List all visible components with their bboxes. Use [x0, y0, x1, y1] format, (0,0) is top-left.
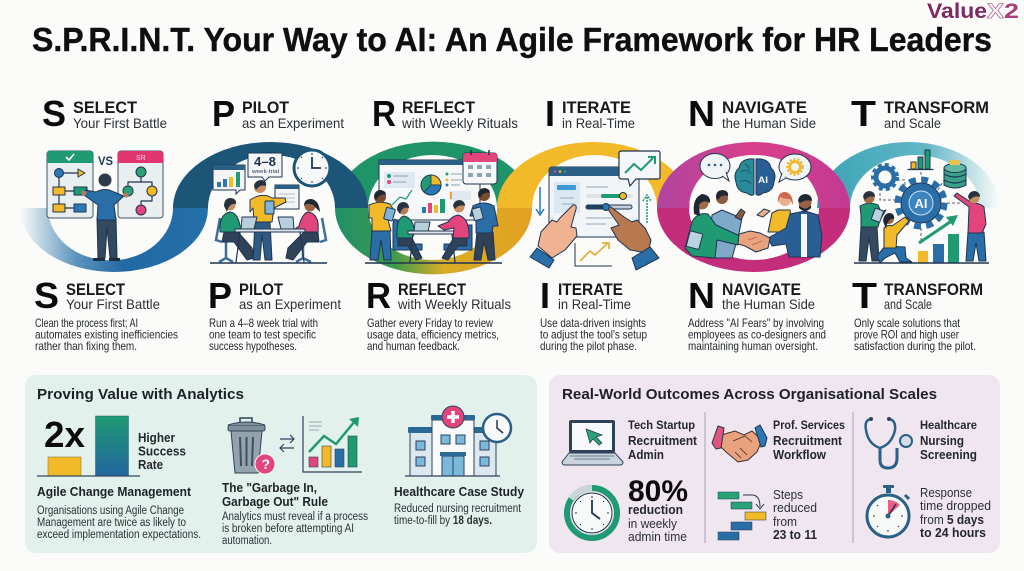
- text: Garbage In, Garbage Out: Analytics must reveal if a process: [222, 511, 368, 523]
- icon: stopwatch: [867, 485, 909, 537]
- label: Tech Startup: [628, 418, 698, 462]
- heading: Select: [42, 93, 167, 134]
- text: Agile Change Management: Organisations using Agile Change: [37, 505, 184, 517]
- step: Pilot: as an Experiment: [239, 296, 341, 312]
- step: Navigate: the Human Side: [722, 296, 815, 312]
- hand: left: [530, 205, 577, 268]
- process card: messy: SR: [136, 155, 146, 162]
- panel heading: Real-World Outcomes Across Organisational Scales: [562, 386, 937, 403]
- dividers: [705, 412, 853, 543]
- text: Healthcare Case Study: Healthcare Case Study: [394, 484, 525, 499]
- label: higher success rate: Rate: [138, 458, 163, 472]
- mini bars: [908, 150, 933, 170]
- step: Transform: satisfaction during the pilot.: [854, 339, 976, 353]
- stat: 80% reduction: [628, 475, 688, 544]
- step: Iterate: I: [540, 275, 550, 316]
- icon: hospital: [405, 406, 511, 476]
- step: Reflect: and human feedback.: [367, 339, 460, 353]
- arrows: adjust: [536, 187, 651, 223]
- step: Iterate: ITERATE: [558, 280, 623, 299]
- icon: handshake: [712, 425, 767, 462]
- text: Agile Change Management: Management are twice as likely to: [37, 517, 186, 529]
- stat: 80% reduction: admin time: [628, 530, 687, 544]
- stat: 80% reduction: reduction: [628, 503, 683, 517]
- step: Navigate: [688, 275, 826, 353]
- step: Iterate: during the pilot phase.: [540, 339, 637, 353]
- hand: right: [609, 207, 659, 270]
- top step headings: [42, 93, 989, 134]
- heading: Select: SELECT: [73, 98, 138, 117]
- label: Healthcare: Nursing: [920, 434, 964, 448]
- step: Pilot: Run a 4–8 week trial with: [209, 316, 318, 330]
- step: Transform: T: [852, 275, 877, 316]
- step: Transform: prove ROI and high user: [854, 328, 959, 342]
- heading: Transform: and Scale: [884, 115, 941, 131]
- heading: Transform: TRANSFORM: [884, 98, 989, 117]
- panel: Real-World Outcomes: [549, 375, 1000, 553]
- step: Reflect: with Weekly Rituals: [397, 296, 511, 312]
- step: Navigate: employees as co-designers and: [688, 328, 826, 342]
- step: Navigate: N: [688, 275, 715, 316]
- stat: response time: Response: [920, 485, 972, 500]
- step: Pilot: P: [208, 275, 232, 316]
- step: Navigate: maintaining human oversight.: [688, 339, 818, 353]
- database: [944, 160, 966, 188]
- label: Tech Startup: Admin: [628, 448, 664, 462]
- AI gear: AI: [914, 196, 928, 211]
- illustration: Select: [47, 151, 163, 261]
- illustration: Iterate: [530, 151, 660, 270]
- step: Reflect: R: [366, 275, 391, 316]
- step descriptions: [34, 275, 983, 353]
- text: Healthcare Case Study: Reduced nursing recruitment: [394, 503, 522, 515]
- icon: swap arrows: [280, 435, 294, 452]
- text: Garbage In, Garbage Out: The "Garbage In,: [222, 480, 317, 495]
- title: S.P.R.I.N.T. Your Way to AI: An Agile Framework for HR Leaders: [32, 21, 992, 58]
- label: higher success rate: [138, 431, 186, 472]
- calendar: [463, 150, 497, 184]
- dashboard screen: [379, 160, 480, 220]
- step: Select: Clean the process first; AI: [35, 316, 138, 330]
- text: Garbage In, Garbage Out: Garbage Out" Rule: [222, 494, 328, 509]
- heading: Pilot: as an Experiment: [242, 115, 344, 131]
- connector lines: [880, 172, 960, 240]
- heading: Reflect: [372, 93, 518, 134]
- stat: 2x bar chart: 2x: [44, 414, 85, 455]
- bubble: 4-8 weeks: week-trial: [251, 169, 279, 175]
- text: Garbage In, Garbage Out: [222, 480, 368, 547]
- bubble: trend: [619, 151, 660, 186]
- logo: ValueX2: 2: [1004, 0, 1019, 23]
- step: Iterate: [540, 275, 647, 353]
- small gear: [872, 164, 898, 190]
- step: Reflect: REFLECT: [398, 280, 467, 299]
- wave ribbon: [20, 142, 1000, 274]
- stat: steps reduced: from: [773, 514, 797, 529]
- icon: clock ring: [567, 488, 617, 538]
- team around table: [365, 188, 502, 263]
- text: Healthcare Case Study: [394, 484, 525, 527]
- heading: Transform: [851, 93, 989, 134]
- label: Prof. Services: Prof. Services: [773, 418, 845, 432]
- stat: 80% reduction: 80%: [628, 475, 688, 508]
- heading: Transform: T: [851, 93, 876, 134]
- icon: trash can: ?: [262, 456, 270, 472]
- label: Healthcare: Healthcare: [920, 418, 977, 432]
- bubble: 4-8 weeks: 4–8: [254, 155, 276, 169]
- window: [275, 185, 299, 209]
- step: Iterate: Use data-driven insights: [540, 316, 646, 330]
- icon: stethoscope: [866, 417, 912, 468]
- dashboard window: [549, 167, 639, 237]
- step: Transform: and Scale: [884, 296, 932, 312]
- step: Navigate: Address "AI Fears" by involving: [688, 316, 824, 330]
- label: Tech Startup: Recruitment: [628, 434, 698, 448]
- panel heading: Proving Value with Analytics: [37, 386, 244, 403]
- step: Reflect: [366, 275, 511, 353]
- heading: Navigate: the Human Side: [722, 115, 816, 131]
- illustration: Navigate: [685, 154, 822, 258]
- step: Select: Your First Battle: [66, 296, 160, 312]
- text: Healthcare Case Study: time-to-fill by 18 days.: [394, 515, 492, 527]
- bubble: 4-8 weeks: [248, 153, 282, 181]
- heading: Pilot: P: [212, 93, 235, 134]
- logo: ValueX2: Value: [927, 0, 987, 23]
- step: Select: rather than fixing them.: [35, 339, 137, 353]
- step: Iterate: in Real-Time: [558, 296, 631, 312]
- heading: Navigate: N: [688, 93, 715, 134]
- stat: response time: from 5 days: [920, 512, 984, 527]
- heading: Reflect: with Weekly Rituals: [401, 115, 518, 131]
- step: Reflect: Gather every Friday to review: [367, 316, 493, 330]
- growth bars and arrow: [918, 215, 959, 263]
- stat: response time: [920, 485, 991, 540]
- step: Transform: TRANSFORM: [884, 280, 983, 299]
- stat: steps reduced: Steps: [773, 487, 803, 502]
- label: Prof. Services: Workflow: [773, 448, 826, 462]
- presenter: [82, 174, 128, 261]
- text: Agile Change Management: exceed implementation expectations.: [37, 529, 201, 541]
- text: Agile Change Management: [37, 484, 201, 541]
- heading: Navigate: NAVIGATE: [722, 98, 807, 117]
- text: Garbage In, Garbage Out: is broken before attempting AI: [222, 523, 354, 535]
- heading: Select: S: [42, 93, 66, 134]
- step: Transform: Only scale solutions that: [854, 316, 961, 330]
- stat: steps reduced: reduced: [773, 500, 817, 515]
- stat: response time: time dropped: [920, 498, 991, 513]
- step: Transform: [852, 275, 983, 353]
- stat: 2x bar chart: [37, 414, 140, 476]
- text: Garbage In, Garbage Out: automation.: [222, 535, 272, 547]
- step: Select: automates existing inefficiencies: [35, 328, 178, 342]
- heading: Navigate: [688, 93, 816, 134]
- brain with AI: AI: [758, 175, 768, 186]
- illustration: Reflect: [365, 150, 502, 263]
- icon: workflow steps: [718, 492, 766, 540]
- label: Healthcare: Screening: [920, 448, 977, 462]
- label: Prof. Services: Recruitment: [773, 434, 843, 448]
- heading: Pilot: PILOT: [242, 98, 290, 117]
- stat: steps reduced: 23 to 11: [773, 527, 817, 542]
- heading: Reflect: REFLECT: [402, 98, 476, 117]
- logo: ValueX2: [927, 0, 1019, 23]
- bubble: gear: [779, 154, 811, 182]
- label: higher success rate: Higher: [138, 431, 175, 445]
- icon: laptop: [562, 420, 623, 465]
- text: Agile Change Management: Agile Change Management: [37, 484, 192, 499]
- icon: trash can: [228, 418, 275, 474]
- heading: Select: Your First Battle: [73, 115, 167, 131]
- panel: Proving Value with Analytics: [25, 375, 537, 553]
- step: Pilot: one team to test specific: [209, 328, 316, 342]
- team: [854, 191, 989, 263]
- step: Iterate: to adjust the tool's setup: [540, 328, 647, 342]
- logo: ValueX2: X: [987, 0, 1004, 23]
- step: Pilot: PILOT: [239, 280, 284, 299]
- illustration: Transform: [854, 150, 989, 263]
- stat: 80% reduction: in weekly: [628, 517, 678, 531]
- heading: Iterate: [545, 93, 635, 134]
- icon: analytics chart: [303, 416, 362, 472]
- step: Select: S: [34, 275, 59, 316]
- label: Healthcare: [920, 418, 977, 462]
- icon: clock: [294, 150, 330, 186]
- mini chart: [575, 243, 612, 266]
- heading: Iterate: I: [545, 93, 555, 134]
- step: Pilot: [208, 275, 341, 353]
- step: Reflect: usage data, efficiency metrics,: [367, 328, 499, 342]
- step: Navigate: NAVIGATE: [722, 280, 801, 299]
- step: Pilot: success hypotheses.: [209, 339, 297, 353]
- seated team and table: [210, 180, 327, 263]
- label: Prof. Services: [773, 418, 845, 462]
- heading: Pilot: [212, 93, 344, 134]
- step: Select: SELECT: [66, 280, 126, 299]
- label: higher success rate: Success: [138, 444, 186, 458]
- group: people and handshake: [685, 190, 822, 258]
- bubble: chart: [213, 165, 245, 194]
- heading: Iterate: in Real-Time: [562, 115, 635, 131]
- stat: response time: to 24 hours: [920, 525, 986, 540]
- step: Select: [34, 275, 178, 353]
- sliders: [586, 192, 633, 210]
- heading: Iterate: ITERATE: [562, 98, 631, 117]
- heading: Reflect: R: [372, 93, 396, 134]
- bubble: chat: [700, 154, 730, 181]
- label: vs: VS: [98, 154, 113, 168]
- process card: clean: [47, 151, 93, 218]
- illustration: Pilot: [210, 150, 330, 263]
- stat: steps reduced: [773, 487, 817, 542]
- label: Tech Startup: Tech Startup: [628, 418, 695, 432]
